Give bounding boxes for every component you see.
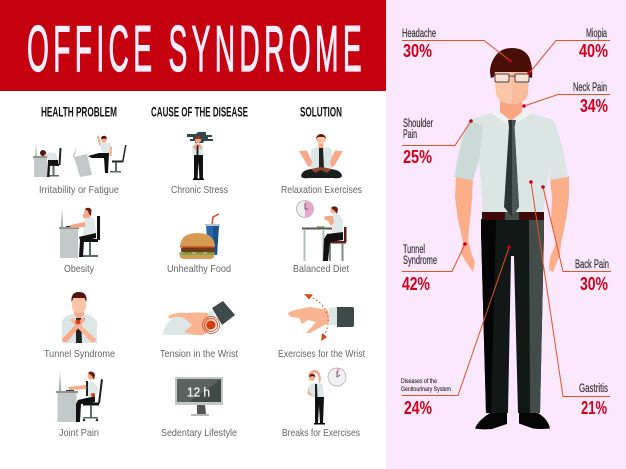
icon: exercises for the wrist — [288, 294, 354, 341]
callout: miopia: Miopia — [586, 28, 607, 40]
label: Joint Pain — [59, 427, 99, 439]
belt — [482, 212, 544, 220]
icon: breaks for exercises — [308, 368, 346, 424]
trousers — [481, 219, 544, 413]
callout: gastritis: 21% — [581, 398, 607, 418]
callout: headache: Headache — [402, 28, 436, 40]
callout lines — [402, 40, 611, 396]
right arm — [549, 176, 569, 272]
label: Obesity — [64, 263, 95, 275]
glasses — [495, 74, 529, 82]
callout: diseases of the genitourinary system: 24% — [404, 398, 432, 418]
callout: headache: 30% — [403, 41, 432, 61]
callout: neck pain: 34% — [580, 96, 608, 116]
label: Balanced Diet — [293, 263, 349, 275]
label: Unhealthy Food — [167, 263, 231, 275]
icon: tension in the wrist — [163, 301, 235, 335]
callout: diseases of the genitourinary system: Diseases of the — [401, 378, 437, 385]
icon: unhealthy food — [179, 214, 220, 259]
label: Tension in the Wrist — [160, 348, 238, 360]
callout: shoulder pain — [403, 118, 433, 167]
callout: tunnel syndrome: Tunnel — [403, 244, 425, 256]
label: Irritability or Fatigue — [39, 184, 119, 196]
label: Exercises for the Wrist — [278, 348, 365, 360]
callout: gastritis: Gastritis — [579, 383, 608, 395]
hair — [490, 48, 532, 78]
icon: obesity — [59, 208, 100, 258]
callout: shoulder pain: 25% — [403, 147, 432, 167]
callout: tunnel syndrome — [402, 244, 437, 294]
callout: tunnel syndrome: 42% — [402, 274, 430, 294]
callout: back pain — [575, 259, 609, 294]
right shoe — [519, 413, 550, 429]
icon: joint pain — [56, 371, 103, 422]
icon: tunnel syndrome — [62, 292, 97, 343]
callout: miopia: 40% — [579, 41, 608, 61]
heading: health problem: HEALTH PROBLEM — [41, 104, 117, 120]
shirt — [454, 113, 568, 212]
callout: shoulder pain: Pain — [403, 129, 417, 141]
callout: diseases of the genitourinary system: Genitourinary System — [401, 386, 451, 393]
icon: balanced diet — [296, 200, 346, 261]
callout: gastritis — [579, 383, 608, 418]
left arm — [455, 176, 475, 272]
callout: tunnel syndrome: Syndrome — [403, 255, 437, 267]
tie — [504, 120, 519, 217]
icon: irritability or fatigue — [33, 136, 126, 177]
callout: back pain: 30% — [580, 274, 608, 294]
callout: shoulder pain: Shoulder — [403, 118, 433, 130]
title banner — [0, 0, 386, 91]
label: Chronic Stress — [171, 184, 228, 196]
left shoe — [475, 413, 507, 429]
icon: relaxation exercises — [299, 134, 343, 178]
label: Tunnel Syndrome — [44, 348, 115, 360]
heading: solution: SOLUTION — [300, 104, 342, 120]
callout: headache — [402, 28, 436, 61]
callout dots — [463, 59, 545, 249]
callout: back pain: Back Pain — [575, 259, 609, 271]
callout: miopia — [579, 28, 608, 61]
icon: sedentary lifestyle monitor — [175, 377, 223, 416]
heading: cause of the disease: CAUSE OF THE DISEASE — [151, 104, 248, 120]
icon: chronic stress — [187, 132, 213, 180]
collar — [491, 109, 532, 127]
label: Breaks for Exercises — [282, 427, 360, 439]
icon: sedentary lifestyle monitor: 12 h — [187, 386, 210, 400]
label: Relaxation Exercises — [281, 184, 362, 196]
neck — [500, 100, 522, 121]
callout: neck pain: Neck Pain — [573, 82, 607, 94]
label: Sedentary Lifestyle — [161, 427, 237, 439]
callout: neck pain — [573, 82, 608, 116]
face — [494, 72, 529, 104]
callout: diseases of the genitourinary system — [401, 378, 451, 418]
panel: right pink background — [386, 0, 626, 469]
figure: standing man — [454, 48, 569, 429]
